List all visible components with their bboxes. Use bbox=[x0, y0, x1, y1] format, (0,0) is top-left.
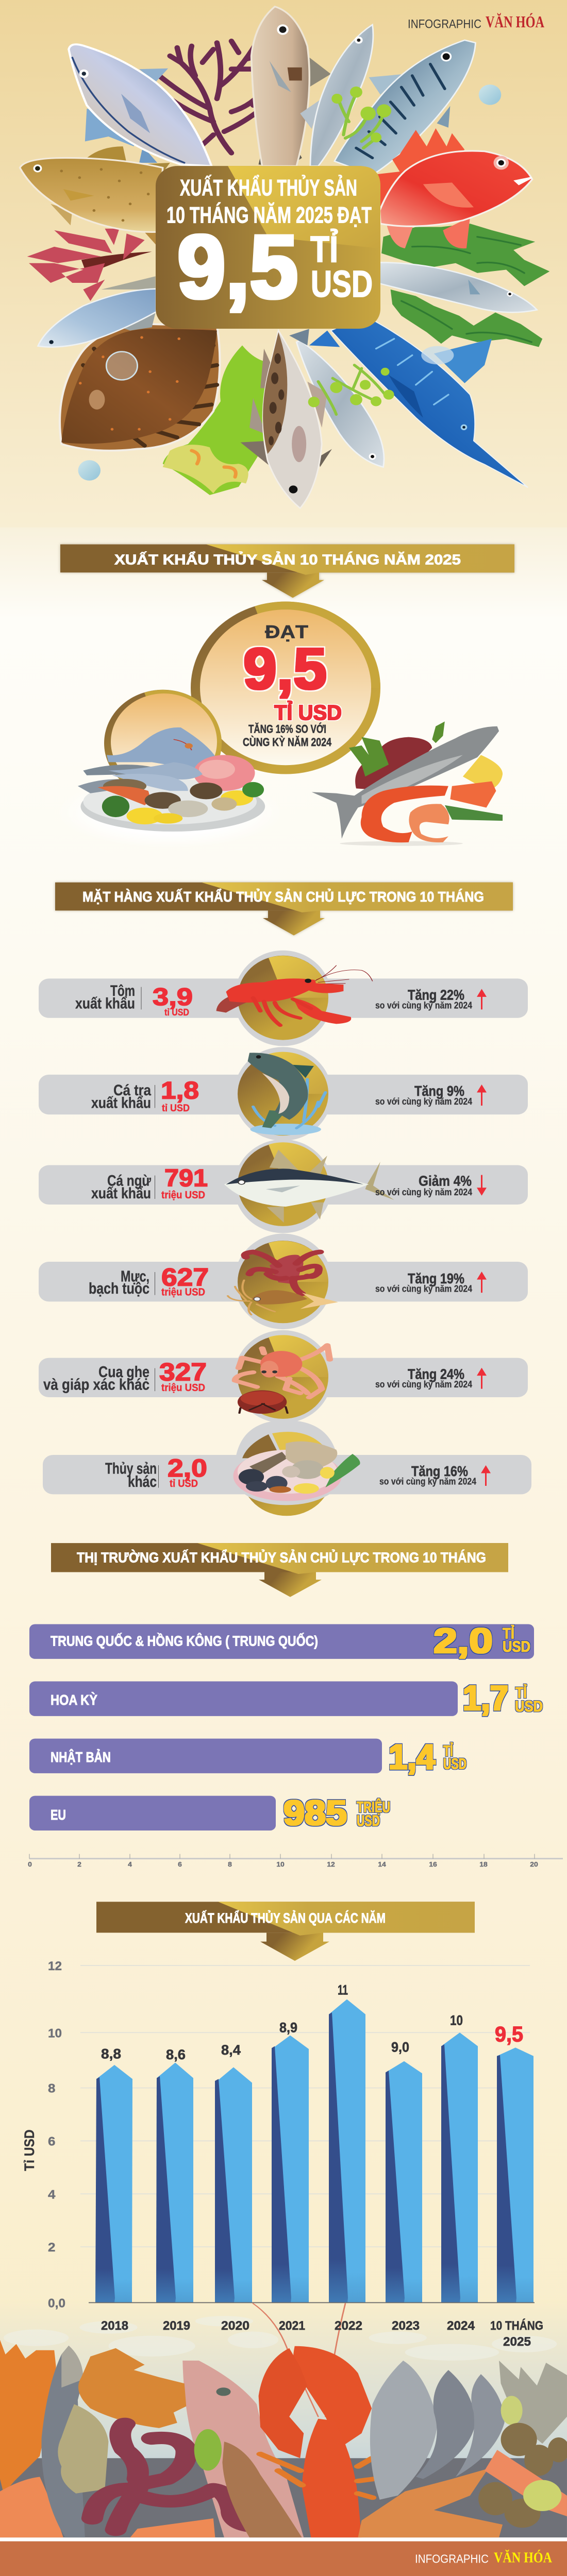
axis: 2 bbox=[77, 1861, 81, 1868]
icon: tuna top left bbox=[69, 44, 211, 166]
unit tỉ usd: TỈ USD bbox=[274, 701, 342, 724]
row: cá ngừ xuất khẩu bbox=[39, 1140, 528, 1233]
bar 10 tháng 2025 bbox=[495, 2022, 533, 2302]
y axis: 4 bbox=[48, 2188, 56, 2201]
icon: green kelp upper right bbox=[381, 224, 549, 286]
x axis: 10 THÁNG bbox=[490, 2318, 543, 2333]
icon: green algae sprig lower bbox=[308, 365, 394, 414]
icon: leaping fish bbox=[248, 1053, 325, 1135]
bar 2018: 8,8 bbox=[101, 2046, 121, 2061]
chart: exports by year bbox=[22, 1960, 543, 2349]
row: mực, bạch tuộc bbox=[39, 1233, 528, 1329]
icon: tuna bbox=[224, 1150, 394, 1223]
heading band: qua các năm: XUẤT KHẨU THỦY SẢN QUA CÁC NĂM bbox=[185, 1910, 386, 1926]
change bbox=[379, 1464, 491, 1487]
value 9,5: 9,5 bbox=[243, 637, 327, 702]
value: 2,0 bbox=[168, 1454, 207, 1482]
photo: grey fish bbox=[41, 2346, 85, 2537]
panel: total value circle bbox=[191, 602, 380, 774]
change bbox=[375, 1367, 487, 1390]
icon: silver mackerel right bbox=[380, 262, 537, 312]
value: 3,9 bbox=[153, 983, 193, 1011]
bar: trung quốc: TRUNG QUỐC & HỒNG KÔNG ( TRUNG QUỐC) bbox=[51, 1633, 318, 1649]
heading band: qua các năm bbox=[96, 1902, 475, 1961]
brand logo top: INFOGRAPHIC bbox=[408, 18, 481, 31]
icon: beige fish bbox=[252, 7, 331, 166]
y axis bbox=[22, 1960, 530, 2310]
heading band: thị trường bbox=[51, 1543, 508, 1597]
photo: oysters bbox=[58, 2404, 108, 2494]
row: thủy sản khác bbox=[43, 1420, 531, 1516]
x axis: 2021 bbox=[279, 2319, 305, 2333]
icon: mackerel bbox=[335, 40, 475, 175]
bar: hoa kỳ bbox=[29, 1679, 543, 1717]
icon: lobster bbox=[216, 965, 373, 1025]
axis: 14 bbox=[378, 1861, 386, 1868]
change bbox=[375, 1083, 487, 1107]
icon: crabs bbox=[235, 1345, 330, 1414]
icon: bright green algae bottom bbox=[163, 345, 268, 495]
bar 2020: 8,4 bbox=[221, 2042, 241, 2058]
bar 2021: 8,9 bbox=[279, 2020, 297, 2035]
axis: 8 bbox=[228, 1861, 232, 1868]
value: tỉ USD bbox=[170, 1478, 198, 1489]
change: so với cùng kỳ năm 2024 bbox=[375, 1380, 472, 1390]
photo: crab bbox=[78, 2348, 186, 2428]
icon: salmon and shrimp bbox=[312, 721, 503, 846]
value: tỉ USD bbox=[164, 1008, 189, 1018]
bar 2019: 8,6 bbox=[166, 2047, 186, 2062]
change: so với cùng kỳ năm 2024 bbox=[379, 1477, 476, 1487]
change: so với cùng kỳ năm 2024 bbox=[375, 1188, 472, 1198]
icon: octopus and squid bbox=[228, 1252, 338, 1315]
hero illustration: fish wreath bbox=[20, 7, 549, 508]
title text: XUẤT KHẨU THỦY SẢN bbox=[180, 175, 357, 200]
label: khác bbox=[128, 1472, 157, 1490]
label bbox=[105, 1460, 159, 1490]
photo: langoustine bbox=[358, 2468, 503, 2537]
bar: hoa kỳ: TỈ bbox=[515, 1684, 527, 1701]
brand logo footer: VĂN HÓA bbox=[494, 2550, 552, 2566]
bar chart: export markets bbox=[28, 1621, 563, 1868]
photo: pink fish bbox=[182, 2361, 304, 2537]
row: cua ghẹ bbox=[39, 1330, 528, 1423]
label bbox=[75, 981, 141, 1012]
bar: eu: USD bbox=[357, 1811, 380, 1829]
value bbox=[161, 1164, 208, 1201]
brand logo footer bbox=[415, 2550, 552, 2566]
photo: lobster bbox=[259, 2346, 374, 2537]
label bbox=[91, 1081, 155, 1111]
bar: hoa kỳ: 1,7 bbox=[463, 1679, 508, 1717]
icon: blue fish left bbox=[38, 276, 156, 347]
axis: 10 bbox=[276, 1861, 285, 1868]
label: Tôm bbox=[110, 981, 135, 999]
bar 2020 bbox=[215, 2042, 252, 2302]
change bbox=[375, 988, 487, 1011]
bar 2024: 10 bbox=[450, 2013, 463, 2028]
bar: trung quốc bbox=[29, 1621, 534, 1660]
bar: hoa kỳ: USD bbox=[515, 1697, 543, 1715]
axis: 4 bbox=[128, 1861, 132, 1868]
label: xuất khẩu bbox=[91, 1094, 151, 1111]
icon: spotted fish bottom bbox=[240, 331, 332, 508]
label: Cá ngừ bbox=[107, 1172, 151, 1189]
photo: shrimps left bbox=[0, 2340, 56, 2494]
bar: eu bbox=[29, 1793, 390, 1832]
y axis: 0,0 bbox=[48, 2297, 65, 2310]
y axis: 6 bbox=[48, 2136, 55, 2148]
x axis: 2020 bbox=[221, 2319, 249, 2333]
change: so với cùng kỳ năm 2024 bbox=[375, 1284, 472, 1294]
bar: nhật bản: USD bbox=[443, 1755, 466, 1772]
x axis: 2022 bbox=[335, 2319, 362, 2333]
bar: nhật bản bbox=[29, 1738, 466, 1776]
title text: 10 THÁNG NĂM 2025 ĐẠT bbox=[166, 202, 372, 228]
value: 327 bbox=[159, 1358, 207, 1386]
page background bbox=[0, 528, 567, 2356]
panel: hero header bbox=[0, 0, 567, 528]
heading band: xuất khẩu 10 tháng: XUẤT KHẨU THỦY SẢN 10 THÁNG NĂM 2025 bbox=[114, 551, 461, 568]
bar: trung quốc: 2,0 bbox=[433, 1621, 493, 1660]
change bbox=[375, 1174, 487, 1198]
change: Tăng 24% bbox=[408, 1367, 464, 1382]
axis: 12 bbox=[327, 1861, 335, 1868]
icon: green kelp lower right bbox=[391, 290, 542, 347]
text: đạt: ĐẠT bbox=[265, 621, 308, 642]
photo: clams bbox=[478, 2423, 567, 2528]
change: so với cùng kỳ năm 2024 bbox=[375, 1001, 472, 1011]
icon: marlin bbox=[309, 316, 528, 487]
x axis: 2018 bbox=[101, 2319, 128, 2333]
growth note: CÙNG KỲ NĂM 2024 bbox=[243, 736, 331, 749]
icon: red fish bbox=[376, 128, 532, 248]
brand logo footer: INFOGRAPHIC bbox=[415, 2553, 489, 2566]
y axis: 12 bbox=[48, 1960, 62, 1973]
photo: ice texture bbox=[4, 2316, 557, 2361]
bar 2024 bbox=[441, 2013, 478, 2302]
y axis: Tỉ USD bbox=[22, 2129, 37, 2171]
x axis: 2019 bbox=[163, 2319, 190, 2333]
photo: lobster antennae bbox=[253, 2303, 345, 2417]
bar: nhật bản: NHẬT BẢN bbox=[51, 1749, 111, 1766]
panel: seafood photo strip bbox=[0, 2300, 567, 2537]
bar: nhật bản: 1,4 bbox=[389, 1738, 435, 1776]
x axis: 2025 bbox=[503, 2335, 531, 2349]
value: 791 bbox=[164, 1164, 208, 1192]
label: và giáp xác khác bbox=[43, 1376, 149, 1393]
value: triệu USD bbox=[161, 1190, 205, 1201]
label bbox=[91, 1172, 155, 1202]
value: triệu USD bbox=[161, 1382, 205, 1394]
axis bbox=[28, 1854, 563, 1868]
axis: 6 bbox=[178, 1861, 182, 1868]
headline value: USD bbox=[311, 263, 373, 305]
bar 2023 bbox=[386, 2040, 422, 2302]
headline value: 9,5 bbox=[177, 216, 298, 317]
heading band: xuất khẩu 10 tháng bbox=[60, 545, 514, 598]
bar: hoa kỳ: HOA KỲ bbox=[51, 1691, 97, 1708]
growth note: TĂNG 16% SO VỚI bbox=[248, 722, 326, 735]
bottom strip and footer bbox=[0, 2537, 567, 2576]
label: Mực, bbox=[121, 1267, 149, 1285]
icon: bubble bottom left bbox=[78, 460, 101, 481]
label: Thủy sản bbox=[105, 1460, 157, 1477]
bar 2019 bbox=[156, 2047, 193, 2302]
axis: 0 bbox=[28, 1861, 32, 1868]
label: xuất khẩu bbox=[75, 994, 135, 1012]
title box bbox=[156, 166, 380, 329]
photo: sea bream bbox=[370, 2361, 438, 2500]
icon: flounder bbox=[60, 324, 220, 451]
photo: octopus bbox=[92, 2424, 248, 2530]
bar 2022: 11 bbox=[338, 1982, 348, 1997]
bar 2021 bbox=[272, 2020, 309, 2302]
value: triệu USD bbox=[161, 1286, 205, 1298]
photo: small fish right bbox=[499, 2361, 567, 2444]
icon: purple seaweed bbox=[159, 41, 270, 153]
headline value: TỈ bbox=[310, 229, 338, 270]
photo: shadow base bbox=[0, 2458, 567, 2537]
bar: eu: TRIỆU bbox=[357, 1798, 390, 1816]
label bbox=[89, 1267, 155, 1297]
row: tôm xuất khẩu bbox=[39, 951, 528, 1046]
heading band: mặt hàng chủ lực: MẶT HÀNG XUẤT KHẨU THỦY SẢN CHỦ LỰC TRONG 10 THÁNG bbox=[82, 888, 484, 905]
bar 10 tháng 2025: 9,5 bbox=[495, 2022, 523, 2046]
icon: shellfish bowl bbox=[233, 1442, 360, 1501]
bar 2018 bbox=[95, 2046, 132, 2302]
heading band: mặt hàng chủ lực bbox=[55, 883, 513, 936]
icon: golden fish bbox=[20, 146, 170, 245]
icon: seafood plate bbox=[57, 727, 283, 849]
y axis: 2 bbox=[48, 2241, 55, 2255]
change: Giảm 4% bbox=[419, 1174, 472, 1189]
label: Cua ghẹ bbox=[98, 1363, 149, 1381]
x axis: 2024 bbox=[447, 2319, 475, 2333]
label: xuất khẩu bbox=[91, 1184, 151, 1202]
photo: salmon slice bbox=[485, 2450, 567, 2516]
y axis: 8 bbox=[48, 2082, 56, 2095]
label bbox=[43, 1363, 155, 1393]
change: Tăng 16% bbox=[411, 1464, 468, 1480]
brand logo top bbox=[408, 12, 544, 31]
row: cá tra xuất khẩu bbox=[39, 1047, 528, 1141]
photo: brown shrimp bbox=[222, 2442, 302, 2537]
icon: red seaweed bbox=[27, 229, 152, 301]
icon: small circle behind seafood plate bbox=[104, 690, 222, 796]
axis: 20 bbox=[530, 1861, 538, 1868]
y axis: 10 bbox=[48, 2027, 62, 2040]
x axis: 2023 bbox=[392, 2319, 420, 2333]
bar: eu: 985 bbox=[284, 1793, 347, 1832]
bar: trung quốc: USD bbox=[503, 1638, 530, 1655]
label: bạch tuộc bbox=[89, 1279, 149, 1297]
bar: eu: EU bbox=[51, 1807, 66, 1823]
bar: trung quốc: TỈ bbox=[503, 1624, 514, 1642]
icon: green algae sprig bbox=[331, 87, 391, 148]
icon: silver fish bottom right bbox=[289, 329, 384, 467]
photo: parsley bbox=[194, 2429, 222, 2470]
axis: 18 bbox=[479, 1861, 488, 1868]
change: Tăng 9% bbox=[414, 1083, 464, 1099]
photo: salmon left bbox=[0, 2477, 63, 2537]
axis: 16 bbox=[429, 1861, 437, 1868]
change bbox=[375, 1271, 487, 1294]
icon: silver fish bbox=[300, 25, 373, 166]
title text bbox=[166, 175, 372, 228]
bar: nhật bản: TỈ bbox=[443, 1742, 453, 1759]
value: 627 bbox=[161, 1263, 209, 1291]
change: so với cùng kỳ năm 2024 bbox=[375, 1097, 472, 1107]
change: Tăng 19% bbox=[408, 1271, 464, 1287]
value: tỉ USD bbox=[162, 1103, 190, 1114]
bar 2022 bbox=[329, 1982, 365, 2302]
growth note bbox=[243, 722, 331, 749]
change: Tăng 22% bbox=[408, 988, 464, 1003]
value: 1,8 bbox=[161, 1076, 199, 1104]
x axis bbox=[89, 2302, 543, 2349]
label: Cá tra bbox=[113, 1081, 151, 1099]
photo: salmon center bbox=[130, 2518, 215, 2537]
icon: bubble right bbox=[479, 84, 501, 105]
bar 2023: 9,0 bbox=[391, 2040, 409, 2055]
photo: lime bbox=[523, 2480, 561, 2511]
